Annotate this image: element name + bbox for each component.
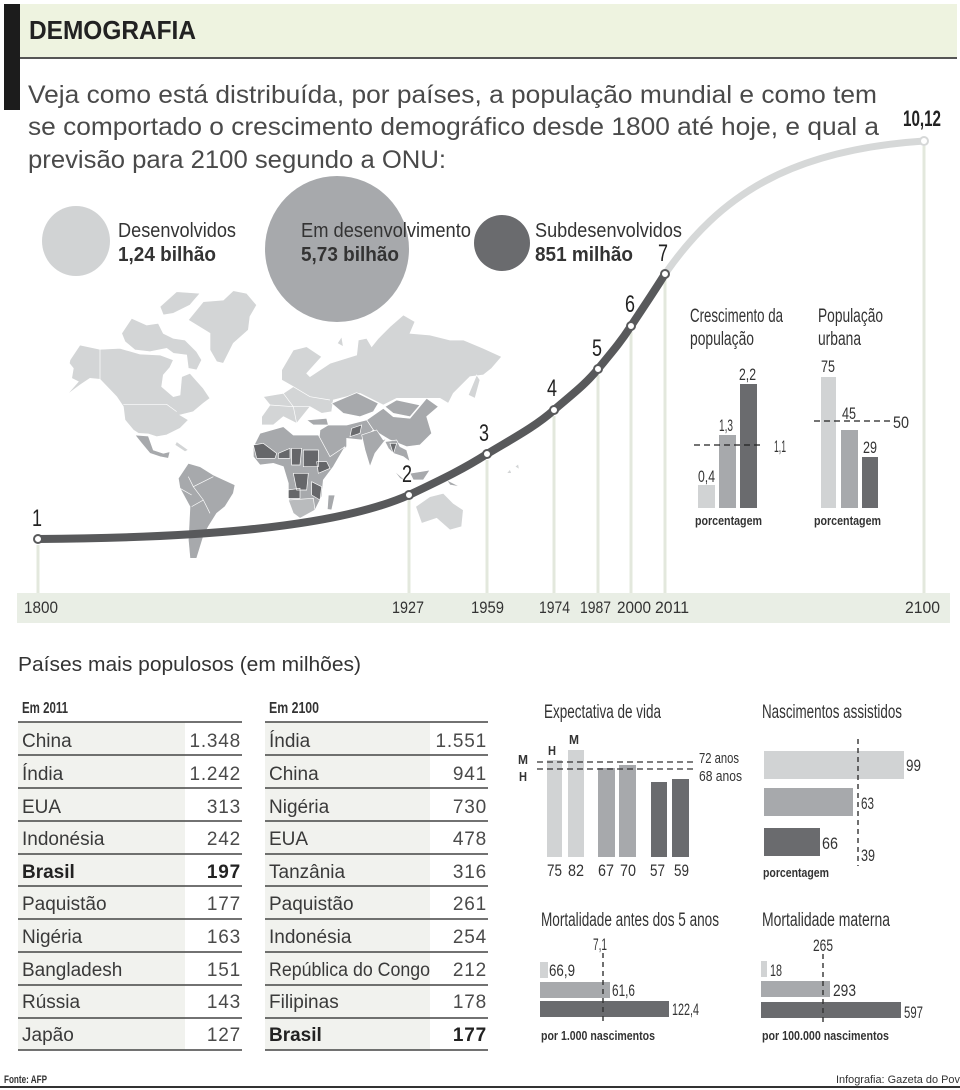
table: 2011: Rússia <box>22 992 81 1013</box>
chart: população urbana <box>814 306 909 528</box>
chart: crescimento da população: porcentagem <box>695 513 762 528</box>
chart: expectativa de vida: M <box>518 752 528 767</box>
table: 2100: 1.551 <box>435 731 487 752</box>
chart: expectativa de vida: 70 <box>620 861 636 880</box>
table: 2011: Indonésia <box>22 829 105 850</box>
chart: crescimento da população: Crescimento da <box>690 306 783 327</box>
population growth curve: 5 <box>592 335 602 362</box>
chart: mortalidade antes dos 5 anos: por 1.000 nascimentos <box>541 1028 655 1043</box>
population growth curve <box>32 106 941 543</box>
chart: mortalidade materna: 293 <box>833 981 856 1000</box>
footer rule <box>0 1086 960 1088</box>
table: 2100: 316 <box>453 862 487 883</box>
chart: mortalidade materna: por 100.000 nascimentos <box>762 1028 889 1043</box>
population circles legend: Subdesenvolvidos <box>535 220 682 242</box>
table: 2100 <box>265 700 488 1050</box>
table: 2011: 177 <box>207 894 241 915</box>
chart: nascimentos assistidos: 39 <box>861 846 875 865</box>
chart: mortalidade materna: 18 <box>770 961 782 980</box>
chart: expectativa de vida: 68 anos <box>699 768 742 785</box>
chart: nascimentos assistidos: porcentagem <box>763 865 829 880</box>
table: 2011: Brasil <box>22 862 75 883</box>
population growth curve: 6 <box>625 291 635 318</box>
chart: crescimento da população: população <box>690 329 754 350</box>
population circles legend: 5,73 bilhão <box>301 244 399 266</box>
chart: expectativa de vida: 72 anos <box>699 750 739 767</box>
table: 2011: Bangladesh <box>22 960 122 981</box>
intro text: previsão para 2100 segundo a ONU: <box>28 146 446 174</box>
population circles legend: 1,24 bilhão <box>118 244 216 266</box>
population circles legend: Em desenvolvimento <box>301 220 471 242</box>
table: 2011: 163 <box>207 927 241 948</box>
table: 2100: 177 <box>453 1025 487 1046</box>
population growth curve: 7 <box>658 240 668 267</box>
chart: crescimento da população: 0,4 <box>698 467 715 486</box>
population growth curve: 1 <box>32 505 42 532</box>
table: 2011: 197 <box>207 862 241 883</box>
chart: nascimentos assistidos: 63 <box>861 794 874 813</box>
table: 2100: Nigéria <box>269 797 330 818</box>
chart: população urbana: População <box>818 306 883 327</box>
chart: mortalidade antes dos 5 anos: 61,6 <box>612 981 635 1000</box>
table: 2100: 261 <box>453 894 487 915</box>
chart: população urbana: 50 <box>893 413 909 432</box>
chart: mortalidade antes dos 5 anos: 66,9 <box>549 961 575 980</box>
chart: mortalidade antes dos 5 anos: Mortalidade antes dos 5 anos <box>541 910 719 931</box>
table: 2011: 242 <box>207 829 241 850</box>
table: 2011: 313 <box>207 797 241 818</box>
chart: crescimento da população: 1,1 <box>774 437 786 456</box>
table: 2011: 1.242 <box>189 764 241 785</box>
chart: população urbana: urbana <box>818 329 861 350</box>
chart: mortalidade antes dos 5 anos <box>540 910 719 1043</box>
intro text: se comportado o crescimento demográfico desde 1800 até hoje, e qual a <box>28 113 879 141</box>
chart: expectativa de vida: 59 <box>674 861 689 880</box>
table: 2011: 143 <box>207 992 241 1013</box>
timeline band: 2100 <box>905 598 940 617</box>
chart: expectativa de vida: H <box>519 769 527 784</box>
chart: população urbana: 75 <box>821 357 835 376</box>
header band <box>4 4 957 110</box>
chart: expectativa de vida: 82 <box>568 861 584 880</box>
circle: subdesenvolvidos <box>474 215 530 271</box>
chart: população urbana: 29 <box>863 438 877 457</box>
chart: população urbana: 45 <box>842 404 856 423</box>
source: Fonte: AFP <box>4 1074 47 1086</box>
chart: expectativa de vida: 75 <box>547 861 562 880</box>
population growth curve: 10,12 <box>903 106 941 131</box>
table: 2100: 478 <box>453 829 487 850</box>
circle: em desenvolvimento <box>265 176 409 322</box>
chart: nascimentos assistidos: 66 <box>822 834 838 853</box>
map: americas and greenland <box>67 291 257 558</box>
chart: nascimentos assistidos: Nascimentos assistidos <box>762 702 902 723</box>
heading: países mais populosos: Países mais populosos (em milhões) <box>18 654 361 676</box>
table: 2100: Paquistão <box>269 894 354 915</box>
table: 2100: 254 <box>453 927 487 948</box>
table: 2100: 212 <box>453 960 487 981</box>
table: 2011: EUA <box>22 797 61 818</box>
timeline band: 1927 <box>392 598 424 617</box>
population circles legend: Desenvolvidos <box>118 220 236 242</box>
table: 2100: República do Congo <box>269 960 430 981</box>
chart: expectativa de vida: Expectativa de vida <box>544 702 661 723</box>
population growth curve: 4 <box>547 375 557 402</box>
table: 2100: Brasil <box>269 1025 322 1046</box>
title: DEMOGRAFIA <box>29 15 196 45</box>
chart: expectativa de vida: 67 <box>598 861 614 880</box>
table: 2100: Filipinas <box>269 992 339 1013</box>
chart: expectativa de vida: H <box>548 743 556 758</box>
population circles legend: 851 milhão <box>535 244 633 266</box>
chart: nascimentos assistidos <box>762 702 921 880</box>
table: 2011: 127 <box>207 1025 241 1046</box>
table: 2100: EUA <box>269 829 308 850</box>
table: 2100: Índia <box>269 731 311 752</box>
chart: mortalidade materna: 597 <box>904 1003 923 1022</box>
chart: mortalidade materna <box>761 910 923 1043</box>
table: 2100: 178 <box>453 992 487 1013</box>
table: 2011: 151 <box>207 960 241 981</box>
circle: desenvolvidos <box>42 206 110 276</box>
table: 2011: Nigéria <box>22 927 83 948</box>
chart: mortalidade materna: Mortalidade materna <box>762 910 890 931</box>
chart: expectativa de vida: M <box>569 732 579 747</box>
table: 2100: Em 2100 <box>269 700 319 717</box>
table: 2100: China <box>269 764 319 785</box>
chart: crescimento da população: 2,2 <box>739 365 756 384</box>
chart: mortalidade antes dos 5 anos: 122,4 <box>672 1000 699 1019</box>
table: 2011: Em 2011 <box>22 700 68 717</box>
timeline band: 1987 <box>580 598 611 617</box>
timeline band: 1800 <box>24 598 58 617</box>
table: 2100: Indonésia <box>269 927 352 948</box>
chart: mortalidade materna: 265 <box>813 936 833 955</box>
intro text: Veja como está distribuída, por países, a população mundial e como tem <box>28 81 877 109</box>
table: 2011: Japão <box>22 1025 74 1046</box>
timeline band <box>17 146 950 623</box>
table: 2100: Tanzânia <box>269 862 345 883</box>
population growth curve: 2 <box>402 461 412 488</box>
population circles legend <box>42 176 682 322</box>
table: 2100: 730 <box>453 797 487 818</box>
chart: crescimento da população <box>690 306 786 528</box>
intro text <box>28 81 879 174</box>
chart: expectativa de vida <box>518 702 742 880</box>
timeline band: 1959 <box>471 598 504 617</box>
table: 2011 <box>18 700 242 1050</box>
chart: expectativa de vida: 57 <box>650 861 665 880</box>
chart: crescimento da população: 1,3 <box>719 416 733 435</box>
map: eurasia africa and oceania <box>253 315 519 530</box>
timeline band: 2011 <box>655 598 689 617</box>
chart: nascimentos assistidos: 99 <box>906 756 921 775</box>
table: 2011: Paquistão <box>22 894 107 915</box>
table: 2100: 941 <box>453 764 487 785</box>
timeline band: 1974 <box>539 598 570 617</box>
population growth curve: 3 <box>479 420 489 447</box>
table: 2011: China <box>22 731 72 752</box>
table: 2011: Índia <box>22 764 64 785</box>
chart: população urbana: porcentagem <box>814 513 881 528</box>
chart: mortalidade antes dos 5 anos: 7,1 <box>593 935 607 954</box>
timeline band: 2000 <box>617 598 651 617</box>
table: 2011: 1.348 <box>189 731 241 752</box>
